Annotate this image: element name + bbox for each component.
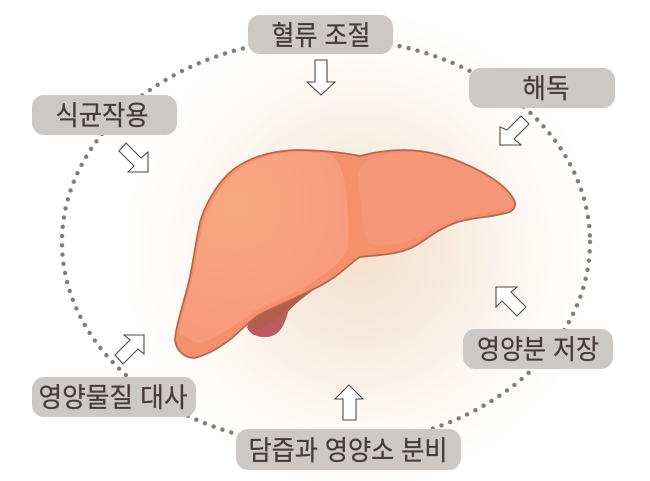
label: detoxification bbox=[469, 68, 615, 108]
liver body bbox=[175, 150, 515, 358]
gallbladder bbox=[247, 287, 317, 337]
label: detoxification: 해독 bbox=[522, 74, 570, 104]
arrow: down from blood regulation bbox=[307, 60, 335, 95]
arrow: toward liver from detox bbox=[500, 116, 529, 145]
label: bile and nutrient secretion: 담즙과 영양소 분비 bbox=[248, 436, 448, 466]
label: phagocytosis bbox=[32, 95, 177, 135]
dotted ring bbox=[62, 38, 590, 446]
label: bile and nutrient secretion bbox=[236, 429, 461, 470]
arrow: toward liver from metabolism bbox=[115, 335, 144, 364]
liver illustration bbox=[175, 150, 515, 358]
label: nutrient storage: 영양분 저장 bbox=[477, 335, 599, 365]
right lobe bbox=[358, 152, 512, 245]
label: nutrient storage bbox=[463, 329, 613, 369]
label: blood regulation bbox=[248, 15, 393, 54]
left lobe bbox=[179, 152, 348, 343]
label: blood regulation: 혈류 조절 bbox=[272, 21, 370, 51]
arrow: toward liver from phagocytosis bbox=[119, 143, 148, 172]
arrow: toward liver from nutrient storage bbox=[496, 287, 526, 316]
label: nutrient metabolism: 영양물질 대사 bbox=[38, 383, 188, 413]
arrow: up from bile secretion bbox=[335, 385, 363, 420]
label: phagocytosis: 식균작용 bbox=[56, 101, 148, 131]
